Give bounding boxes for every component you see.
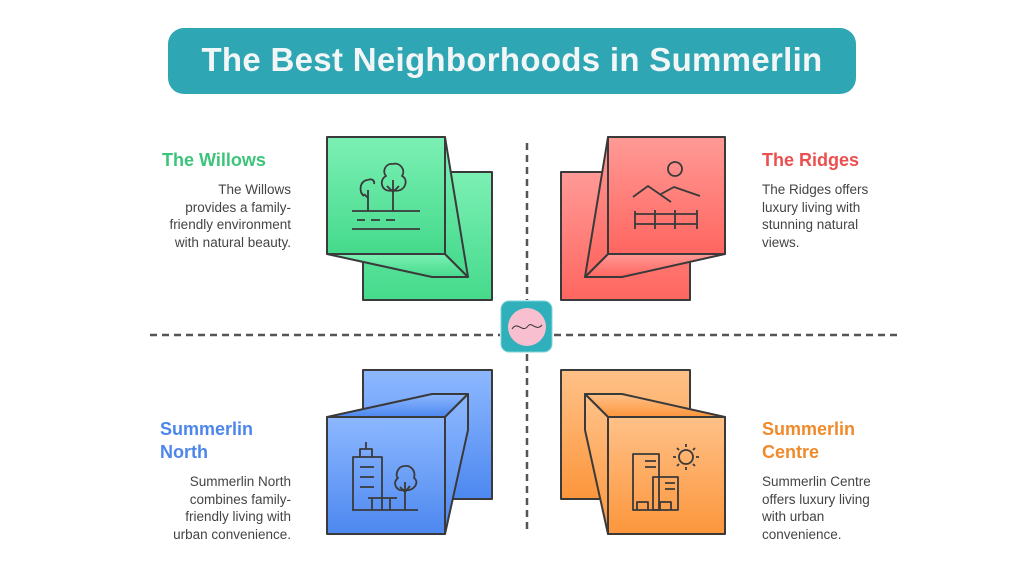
text block: Summerlin North: combines family- xyxy=(190,492,291,506)
text block: The Willows: with natural beauty. xyxy=(175,234,291,250)
text block: Summerlin North: North xyxy=(160,442,208,462)
text block: The Ridges: The Ridges offers xyxy=(762,182,868,197)
text block: Summerlin North: friendly living with xyxy=(185,509,291,524)
text block: Summerlin Centre: Summerlin Centre xyxy=(762,474,871,489)
text block: The Willows: The Willows xyxy=(218,182,291,197)
text block: The Willows xyxy=(162,150,291,250)
icon: center logo xyxy=(501,301,552,352)
text block: Summerlin Centre: with urban xyxy=(762,509,824,524)
text block: The Ridges: The Ridges xyxy=(762,150,859,170)
icon: buildings and sun xyxy=(633,444,699,510)
text block: Summerlin Centre xyxy=(762,419,871,542)
panel: The Willows block xyxy=(327,137,492,300)
icon: trees xyxy=(352,164,420,229)
text block: Summerlin Centre: convenience. xyxy=(762,526,842,542)
text block: The Ridges: stunning natural xyxy=(762,217,858,232)
text block: The Willows: provides a family- xyxy=(185,200,291,214)
icon: building and tree xyxy=(352,442,418,510)
text block: Summerlin North: Summerlin xyxy=(160,419,253,439)
text block: The Ridges: luxury living with xyxy=(762,200,860,214)
panel: The Ridges block xyxy=(561,137,725,300)
panel: Summerlin North block xyxy=(327,370,492,534)
text block: The Willows: friendly environment xyxy=(169,217,291,232)
title xyxy=(168,28,856,94)
text block: Summerlin Centre: Summerlin xyxy=(762,419,855,439)
text block: The Ridges xyxy=(762,150,868,250)
title: The Best Neighborhoods in Summerlin xyxy=(201,41,823,78)
text block: Summerlin Centre: offers luxury living xyxy=(762,492,870,506)
icon: landscape with fence xyxy=(633,162,700,229)
text block: Summerlin North: urban convenience. xyxy=(173,526,291,542)
panel: Summerlin Centre block xyxy=(561,370,725,534)
text block: The Ridges: views. xyxy=(762,234,800,250)
text block: The Willows: The Willows xyxy=(162,150,266,170)
text block: Summerlin Centre: Centre xyxy=(762,442,819,462)
text block: Summerlin North xyxy=(160,419,291,542)
text block: Summerlin North: Summerlin North xyxy=(190,474,291,489)
